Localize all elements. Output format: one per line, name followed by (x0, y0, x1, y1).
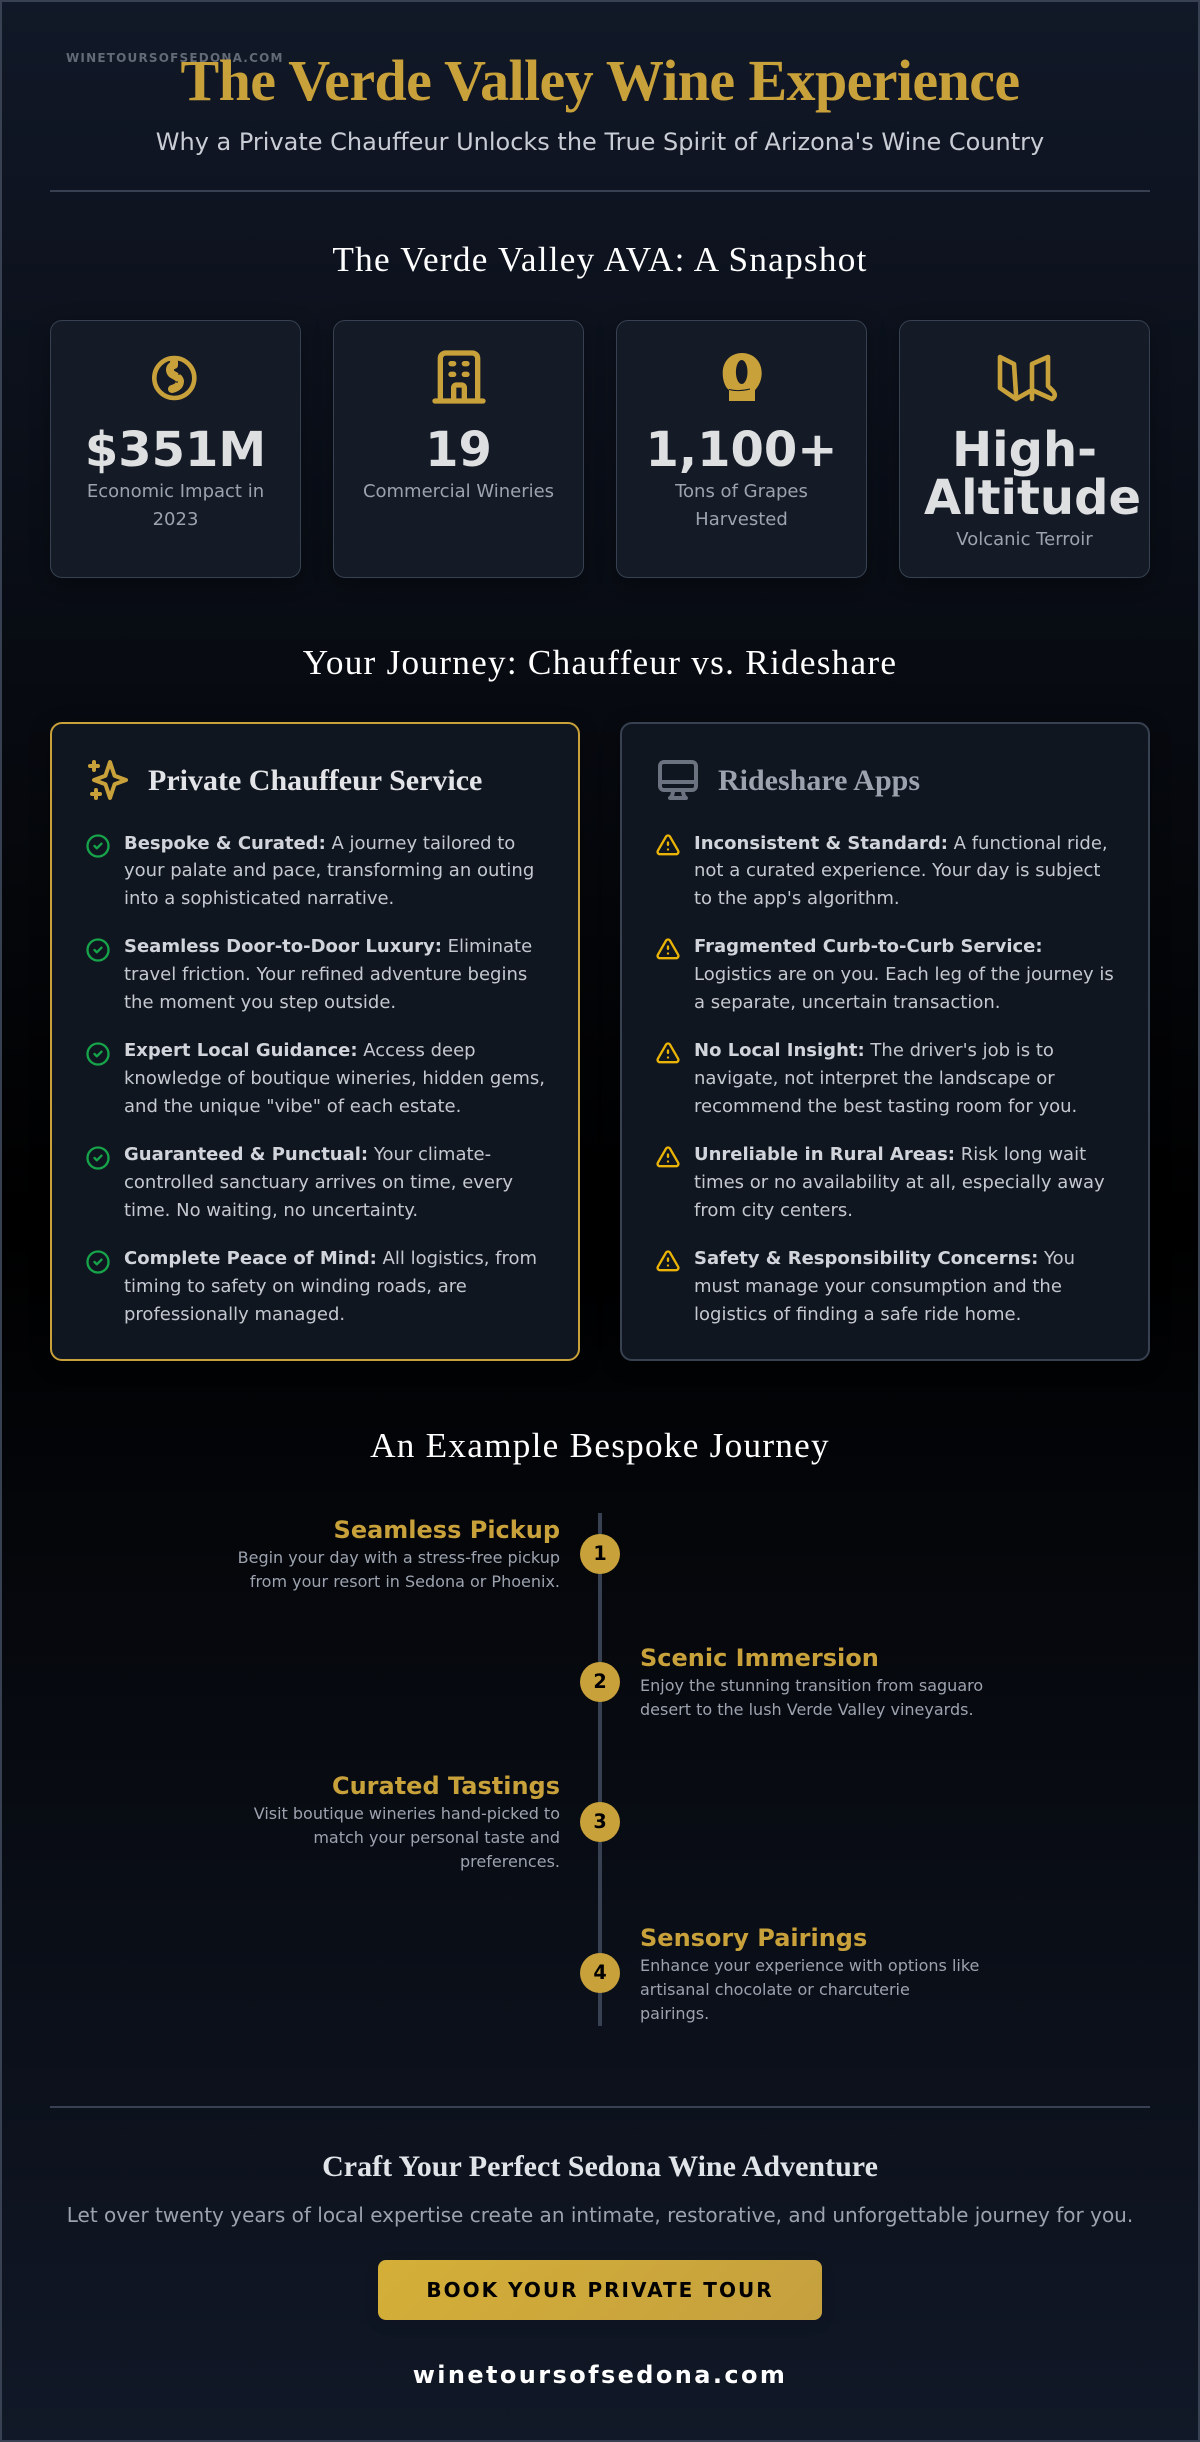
drawback item: Fragmented Curb-to-Curb Service: (694, 936, 1043, 957)
drawback item (656, 1248, 1075, 1325)
benefit item: Complete Peace of Mind: All logistics, from (124, 1248, 537, 1269)
drawback item: Safety & Responsibility Concerns: You (694, 1248, 1075, 1269)
benefit item: professionally managed. (124, 1304, 345, 1325)
icon: grape (722, 353, 762, 401)
heading: journey: An Example Bespoke Journey (370, 1426, 830, 1465)
timeline marker 2 (580, 1662, 620, 1702)
panel: stat economic impact (50, 320, 301, 578)
drawback item (656, 1040, 1077, 1117)
timeline step 4 text: pairings. (640, 2004, 709, 2023)
stat value: $351M (85, 422, 266, 478)
drawback item: No Local Insight: The driver's job is to (694, 1040, 1054, 1061)
timeline marker 4 (580, 1952, 620, 1992)
subtitle: Why a Private Chauffeur Unlocks the True Spirit of Arizona's Wine Country (156, 128, 1044, 156)
stat label (675, 481, 808, 530)
panel: rideshare apps (620, 722, 1150, 1361)
heading: snapshot: The Verde Valley AVA: A Snapshot (332, 240, 868, 279)
benefit item: controlled sanctuary arrives on time, every (124, 1172, 513, 1193)
timeline marker 1 (580, 1534, 620, 1574)
stat label: Commercial Wineries (363, 481, 554, 502)
icon: sparkles (88, 760, 128, 800)
timeline step 3 text (254, 1772, 560, 1871)
heading: comparison: Your Journey: Chauffeur vs. Rideshare (303, 642, 897, 682)
benefit item: and the unique "vibe" of each estate. (124, 1096, 461, 1117)
panel: stat altitude (899, 320, 1150, 578)
drawback item: to the app's algorithm. (694, 888, 900, 909)
timeline step 3 text: Visit boutique wineries hand-picked to (254, 1804, 560, 1823)
drawback item (656, 1144, 1105, 1221)
stat label: Harvested (695, 509, 788, 530)
timeline step 3 text: Curated Tastings (332, 1772, 560, 1800)
benefit item: travel friction. Your refined adventure begins (124, 964, 527, 985)
timeline step 1 text: Begin your day with a stress-free pickup (238, 1548, 560, 1567)
stat value: 19 (425, 422, 492, 478)
timeline step 2 text: Enjoy the stunning transition from saguaro (640, 1676, 983, 1695)
timeline marker 2: 2 (593, 1670, 607, 1692)
timeline step 2 text: Scenic Immersion (640, 1644, 879, 1672)
benefit item: into a sophisticated narrative. (124, 888, 394, 909)
timeline step 1 text: Seamless Pickup (334, 1516, 560, 1544)
benefit item: Bespoke & Curated: A journey tailored to (124, 832, 515, 854)
timeline line (598, 1513, 602, 2026)
benefit item: timing to safety on winding roads, are (124, 1276, 467, 1297)
timeline step 1 text (238, 1516, 560, 1591)
timeline marker 1: 1 (593, 1542, 607, 1564)
website: winetoursofsedona.com (413, 2361, 787, 2389)
benefit item (86, 936, 532, 1013)
call to action text: Let over twenty years of local expertise create an intimate, restorative, and unforgettable journey for you. (67, 2203, 1133, 2227)
button (378, 2260, 822, 2320)
drawback item: not a curated experience. Your day is subject (694, 860, 1100, 881)
timeline step 2 text: desert to the lush Verde Valley vineyards. (640, 1700, 974, 1719)
panel heading: Rideshare Apps (718, 764, 920, 797)
watermark: WINETOURSOFSEDONA.COM (66, 51, 284, 65)
benefit item: Seamless Door-to-Door Luxury: Eliminate (124, 936, 532, 957)
benefit item: your palate and pace, transforming an outing (124, 860, 534, 881)
timeline step 1 text: from your resort in Sedona or Phoenix. (250, 1572, 560, 1591)
drawback item: must manage your consumption and the (694, 1276, 1062, 1297)
call to action heading: Craft Your Perfect Sedona Wine Adventure (322, 2150, 878, 2183)
timeline marker 4: 4 (593, 1960, 607, 1984)
timeline marker 3: 3 (593, 1810, 607, 1832)
benefit item: time. No waiting, no uncertainty. (124, 1200, 418, 1221)
benefit item (86, 1040, 545, 1117)
stat value: High- (952, 422, 1097, 478)
timeline step 2 text (640, 1644, 983, 1719)
panel heading: Private Chauffeur Service (148, 764, 482, 797)
stat label (87, 481, 264, 530)
drawback item: Inconsistent & Standard: A functional ride, (694, 832, 1108, 854)
drawback item: Logistics are on you. Each leg of the journey is (694, 964, 1114, 985)
drawback item: navigate, not interpret the landscape or (694, 1068, 1055, 1089)
benefit item: the moment you step outside. (124, 992, 396, 1013)
button: BOOK YOUR PRIVATE TOUR (426, 2278, 774, 2302)
icon: dollar coin (152, 356, 197, 400)
stat value: Altitude (924, 470, 1141, 526)
panel: stat wineries (333, 320, 584, 578)
icon: monitor (658, 760, 698, 800)
stat value (924, 422, 1141, 526)
stat label: Economic Impact in (87, 481, 264, 502)
panel: stat grapes (616, 320, 867, 578)
benefit item: Guaranteed & Punctual: Your climate- (124, 1144, 491, 1165)
drawback item (656, 936, 1114, 1013)
icon: open book (998, 354, 1058, 402)
drawback item: from city centers. (694, 1200, 853, 1221)
timeline step 4 text (640, 1924, 979, 2023)
title: The Verde Valley Wine Experience (180, 48, 1020, 113)
stat value: 1,100+ (645, 422, 838, 478)
timeline step 3 text: match your personal taste and (313, 1828, 560, 1847)
drawback item: times or no availability at all, especially away (694, 1172, 1105, 1193)
benefit item (86, 1248, 537, 1325)
benefit item: Expert Local Guidance: Access deep (124, 1040, 476, 1061)
stat label: Volcanic Terroir (956, 529, 1093, 550)
icon: building (432, 350, 486, 404)
benefit item (86, 1144, 513, 1221)
drawback item: logistics of finding a safe ride home. (694, 1304, 1021, 1325)
stat label: 2023 (153, 509, 198, 530)
timeline step 4 text: Enhance your experience with options like (640, 1956, 979, 1975)
timeline step 4 text: artisanal chocolate or charcuterie (640, 1980, 910, 1999)
benefit item (86, 832, 534, 909)
drawback item (656, 832, 1108, 909)
benefit item: knowledge of boutique wineries, hidden gems, (124, 1068, 545, 1089)
drawback item: Unreliable in Rural Areas: Risk long wait (694, 1144, 1086, 1165)
drawback item: a separate, uncertain transaction. (694, 992, 1000, 1013)
timeline marker 3 (580, 1802, 620, 1842)
drawback item: recommend the best tasting room for you. (694, 1096, 1077, 1117)
timeline step 4 text: Sensory Pairings (640, 1924, 867, 1952)
panel: private chauffeur (50, 722, 580, 1361)
stat label: Tons of Grapes (675, 481, 808, 502)
timeline step 3 text: preferences. (460, 1852, 560, 1871)
